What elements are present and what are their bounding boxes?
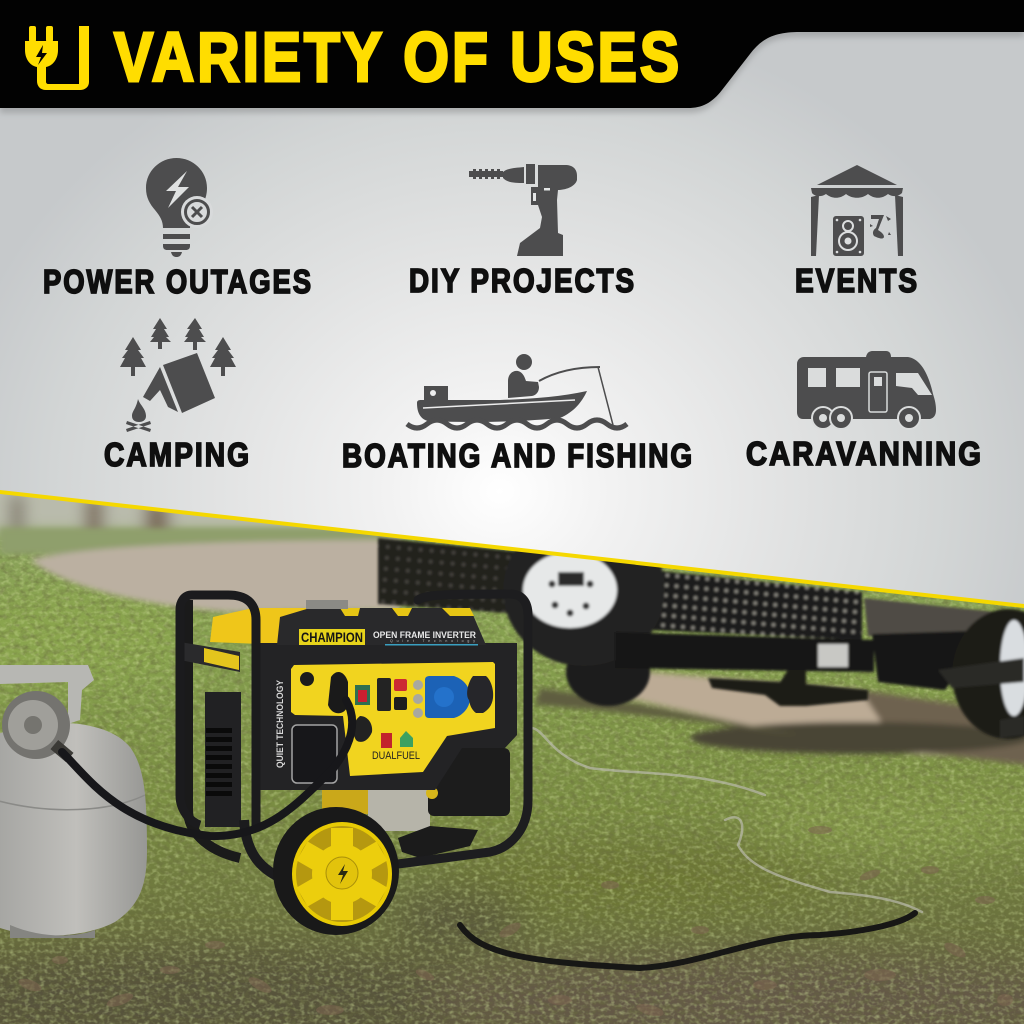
wheel rim	[523, 552, 617, 628]
fuel cap	[306, 600, 348, 609]
item: events	[795, 165, 919, 299]
fuel tank yellow	[210, 608, 320, 645]
model text: OPEN FRAME INVERTER	[373, 630, 476, 640]
item: power outages	[43, 158, 313, 300]
blue socket	[425, 676, 470, 718]
meter	[377, 678, 391, 711]
icon: light bulb with cross	[146, 158, 213, 257]
air vent window	[292, 725, 337, 783]
side grille	[206, 728, 232, 796]
yellow diagonal stripe	[0, 490, 1024, 608]
label: EVENTS	[795, 262, 919, 299]
icon: fishing boat	[407, 354, 627, 428]
engine under panel	[322, 748, 510, 858]
label: DIY PROJECTS	[409, 262, 636, 299]
propane tank	[0, 665, 147, 938]
frame front	[180, 595, 256, 828]
label: CARAVANNING	[746, 435, 983, 472]
label: CAMPING	[104, 436, 251, 473]
icon: gazebo with speaker	[811, 165, 903, 256]
black breaker	[394, 697, 407, 710]
fuel hose	[62, 700, 352, 836]
tyre	[273, 807, 399, 935]
main tyre	[503, 514, 665, 666]
icon: tent, trees, campfire	[120, 318, 236, 432]
item: camping	[104, 318, 251, 473]
breaker knobs	[413, 680, 423, 718]
black hose on ground	[460, 913, 915, 968]
brand badge: CHAMPION	[301, 629, 363, 645]
rear tyre	[566, 638, 650, 706]
dual fuel text: DUALFUEL	[372, 750, 420, 762]
small socket	[353, 716, 372, 742]
label: BOATING AND FISHING	[342, 437, 694, 474]
outlet LPG	[328, 672, 348, 713]
item: diy projects	[409, 164, 636, 299]
yellow hub	[292, 822, 392, 926]
title: VARIETY OF USES	[114, 18, 682, 96]
tank body	[0, 723, 147, 936]
black socket	[467, 676, 493, 713]
item: caravanning	[746, 351, 983, 472]
hub centre	[326, 857, 358, 889]
generator	[62, 594, 528, 935]
item: boating and fishing	[342, 354, 694, 474]
underside	[872, 630, 1000, 690]
photo: outdoor scene background	[0, 470, 1024, 1024]
photo: fallen leaves on ground	[17, 826, 1013, 1018]
icon: camper van	[797, 351, 936, 429]
beam	[615, 632, 874, 672]
fuel icons	[381, 733, 392, 748]
regulator	[2, 691, 70, 759]
yellow control panel	[291, 662, 495, 776]
icon: plug	[25, 26, 89, 90]
engine side box	[205, 692, 241, 827]
rear label band	[180, 642, 240, 672]
control housing	[258, 643, 517, 790]
mesh panel left	[378, 538, 520, 614]
label: POWER OUTAGES	[43, 263, 313, 300]
model text: Quiet Technology	[390, 639, 475, 643]
grey panel	[0, 0, 1024, 608]
control knob	[300, 672, 314, 686]
grey cords on grass	[532, 728, 922, 912]
red breaker	[394, 679, 407, 691]
step	[938, 658, 1024, 688]
icon: drill	[469, 164, 577, 256]
hitch	[708, 670, 868, 706]
frame rear	[188, 600, 240, 858]
right tyre	[952, 609, 1024, 739]
top cover	[277, 608, 486, 645]
mesh panel right	[650, 570, 862, 640]
model text	[373, 630, 478, 646]
tank foot	[10, 925, 95, 938]
tank collar	[0, 665, 94, 724]
photo: trailer	[378, 514, 1024, 739]
power switch	[355, 685, 370, 705]
quiet technology vertical text: QUIET TECHNOLOGY	[275, 680, 285, 768]
header bar	[0, 0, 1024, 113]
trailer side	[864, 598, 1024, 640]
